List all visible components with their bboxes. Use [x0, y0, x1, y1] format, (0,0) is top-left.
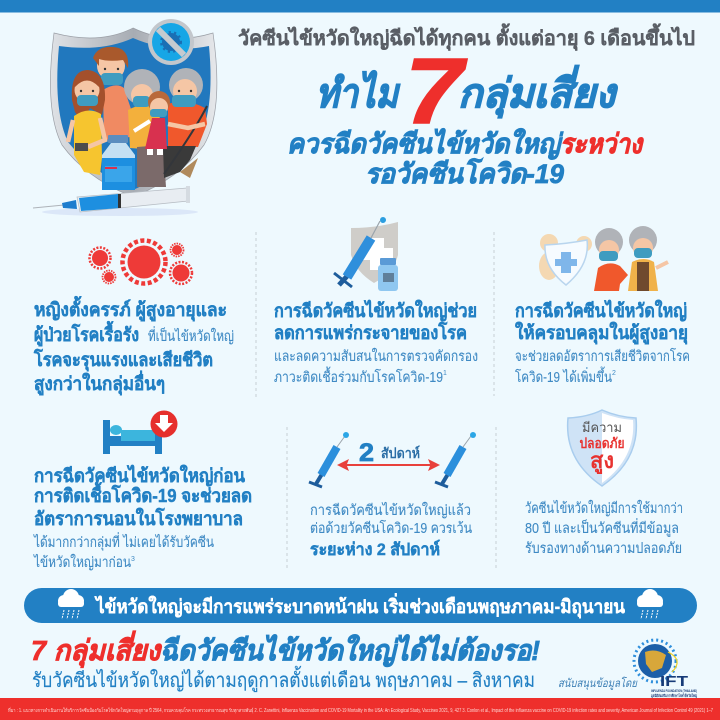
panel 4 text [33, 464, 252, 571]
panel 2 text: การฉีดวัคซีนไข้หวัดใหญ่ช่วย [274, 299, 477, 322]
panel 4 text: การฉีดวัคซีนไข้หวัดใหญ่ก่อน [34, 464, 245, 487]
logo: IFT [634, 640, 697, 699]
icon: safety shield [568, 410, 636, 486]
icon: syringe, shield and vial [334, 217, 398, 291]
call to action heading [31, 630, 540, 668]
arrow: two-headed [337, 459, 440, 471]
panel 2: reduce spread [274, 217, 478, 386]
title line 2: ระหว่าง [560, 129, 645, 159]
main title: 7 [405, 39, 468, 143]
panel 3 text: 2 [612, 370, 616, 377]
panel 3 text: โควิด-19 ได้เพิ่มขึ้น [515, 366, 612, 386]
panel 2 text: และลดความสับสนในการตรวจคัดกรอง [274, 347, 478, 365]
logo: IFT: มูลนิธิส่งเสริมการศึกษาโรคไข้หวัดใหญ่ [651, 692, 697, 699]
icon: right syringe [435, 432, 476, 487]
panel 2 text: 1 [443, 370, 447, 377]
panel 1: high risk groups [33, 240, 234, 396]
panel 4 text: การติดเชื้อโควิด-19 จะช่วยลด [34, 482, 252, 506]
icon: bed with down arrow [103, 410, 178, 454]
grandmother [124, 69, 166, 187]
panel 2 text: ลดการแพร่กระจายของโรค [274, 321, 467, 343]
supporter credit: สนับสนุนข้อมูลโดย [558, 676, 638, 690]
header subtitle: วัคซีนไข้หวัดใหญ่ฉีดได้ทุกคน ตั้งแต่อายุ 6 เดือนขึ้นไป [238, 23, 695, 51]
footer references bar [0, 698, 720, 720]
panel 1 text: ผู้ป่วยโรคเรื้อรัง [34, 321, 139, 347]
title line 2: ควรฉีดวัคซีนไข้หวัดใหญ่ [287, 128, 564, 160]
rainy season banner [24, 588, 697, 623]
panel 4 text: ได้มากกว่ากลุ่มที่ ไม่เคยได้รับวัคซีน [33, 532, 214, 551]
vaccine vial [102, 135, 135, 190]
main title: กลุ่มเสี่ยง [458, 65, 618, 119]
panel 1 text: หญิงตั้งครรภ์ ผู้สูงอายุและ [34, 296, 227, 322]
icon: safety shield: สูง [590, 448, 614, 475]
top bar [0, 0, 720, 12]
panel 5: two-week gap [309, 432, 476, 559]
panel 6 text: รับรองทางด้านความปลอดภัย [525, 540, 682, 557]
icon: right rain cloud [637, 589, 663, 619]
panel 1 text: สูงกว่าในกลุ่มอื่นๆ [34, 370, 165, 396]
title line 3: รอวัคซีนโควิด-19 [365, 157, 564, 189]
panel 4 text: 3 [131, 556, 135, 563]
label: 2 weeks: สัปดาห์ [381, 445, 420, 461]
woman [68, 70, 105, 175]
panel 1 text: ที่เป็นไข้หวัดใหญ่ [148, 326, 234, 345]
panel 5 text: ต่อด้วยวัคซีนโควิด-19 ควรเว้น [310, 519, 472, 537]
banner text: ไข้หวัดใหญ่จะมีการแพร่ระบาดหน้าฝน เริ่มช่วงเดือนพฤษภาคม-มิถุนายน [94, 593, 625, 619]
panel 1 text: โรคจะรุนแรงและเสียชีวิต [33, 348, 213, 372]
shield [50, 28, 217, 197]
main title [316, 39, 618, 143]
syringe [33, 186, 190, 212]
panel 3: elderly coverage [515, 226, 690, 386]
icon: safety shield: มีความ [582, 420, 622, 435]
man [93, 47, 132, 140]
panel 6 text [525, 499, 683, 557]
panel 5 text: การฉีดวัคซีนไข้หวัดใหญ่แล้ว [310, 501, 471, 519]
panel 5 text: ระยะห่าง 2 สัปดาห์ [310, 539, 440, 559]
panel 2 text: ภาวะติดเชื้อร่วมกับโรคโควิด-19 [274, 366, 443, 386]
illustration: family in shield [33, 19, 217, 216]
panel 3 text [515, 299, 690, 386]
icon: safety shield: ปลอดภัย [580, 435, 624, 451]
grandfather [163, 68, 207, 178]
call to action heading: ฉีดวัคซีนไข้หวัดใหญ่ได้ไม่ต้องรอ! [160, 634, 540, 667]
panel 3 text: ให้ครอบคลุมในผู้สูงอายุ [515, 321, 688, 345]
icon: left rain cloud [58, 589, 84, 619]
call to action heading: 7 กลุ่มเสี่ยง [31, 630, 162, 668]
panel 4 text: ไข้หวัดใหญ่มาก่อน [33, 553, 131, 571]
label: 2 weeks: 2 [359, 439, 374, 467]
panel 4: hospitalization [33, 410, 252, 571]
label: 2 weeks [359, 439, 420, 467]
icon: red viruses [90, 240, 192, 284]
icon: left syringe [309, 432, 349, 487]
call to action subtext: รับวัคซีนไข้หวัดใหญ่ได้ตามฤดูกาลตั้งแต่เดือน พฤษภาคม – สิงหาคม [32, 666, 535, 693]
panel 1 text [33, 296, 234, 396]
panel 6 text: 80 ปี และเป็นวัคซีนที่มีข้อมูล [525, 518, 679, 537]
logo: IFT: IFT [660, 673, 688, 690]
child [134, 91, 170, 155]
panel 4 text: อัตราการนอนในโรงพยาบาล [34, 507, 243, 529]
panel 6: safety [525, 410, 683, 557]
panel 3 text: การฉีดวัคซีนไข้หวัดใหญ่ [515, 299, 687, 322]
logo: IFT: INFLUENZA FOUNDATION (THAILAND) [651, 689, 697, 693]
panel 5 text [310, 501, 472, 559]
main title: ทำไม [316, 70, 400, 116]
icon: elderly couple with shield [539, 226, 668, 291]
virus badge [148, 19, 194, 65]
panel 2 text [274, 299, 478, 386]
